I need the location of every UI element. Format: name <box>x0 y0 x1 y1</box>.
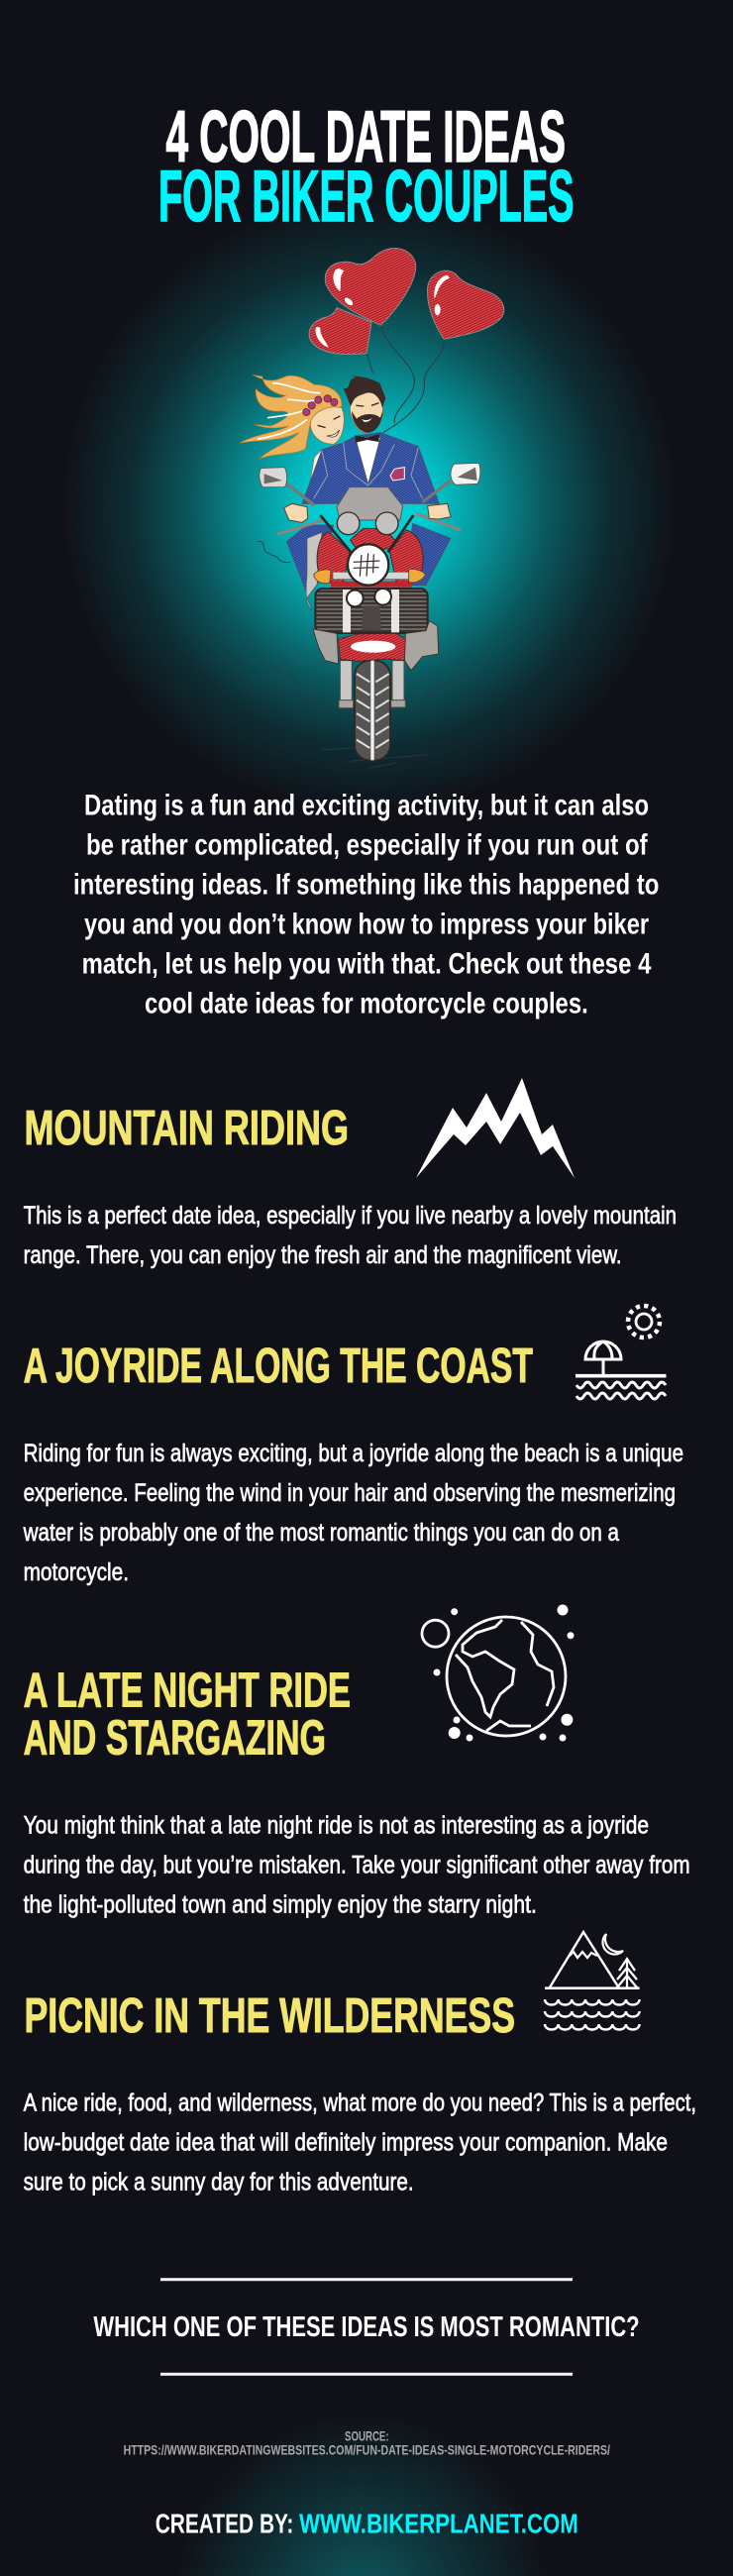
closing question <box>93 2278 640 2376</box>
credit <box>156 2509 578 2539</box>
side covers <box>313 621 439 671</box>
text: picnic <box>24 2090 696 2197</box>
icon: mountain, moon, tree and water <box>545 1932 640 2029</box>
text: late night ride <box>24 1812 690 1919</box>
man head <box>344 376 385 433</box>
legs in jacket blue <box>286 525 334 591</box>
icon: beach <box>576 1306 666 1399</box>
intro paragraph: cool date ideas for motorcycle couples. <box>145 988 588 1020</box>
source: SOURCE: <box>345 2427 389 2443</box>
balloon strings <box>366 325 444 433</box>
handlebar levers <box>277 513 461 534</box>
turn signals <box>314 570 425 584</box>
heart balloon right <box>427 270 504 339</box>
credit: CREATED BY: <box>156 2509 293 2539</box>
heart balloon lower left <box>309 308 371 355</box>
section: picnic in the wilderness <box>24 1932 696 2197</box>
section: joyride along the coast <box>23 1306 683 1586</box>
twin lights <box>337 512 398 535</box>
text: mountain riding <box>24 1202 677 1269</box>
balloon highlights <box>316 268 450 348</box>
heading: late night ride: A LATE NIGHT RIDE <box>24 1664 351 1718</box>
balloons and couple <box>240 249 504 505</box>
radiator block <box>315 589 428 633</box>
red tanks <box>317 528 423 584</box>
flowing hair <box>240 375 342 459</box>
tyre <box>355 661 390 760</box>
top glow <box>40 188 693 822</box>
bottom glow <box>99 2408 634 2576</box>
heading: mountain riding: MOUNTAIN RIDING <box>24 1101 349 1155</box>
wedding dress trail <box>258 542 468 768</box>
headlight <box>348 544 388 586</box>
text: picnic: sure to pick a sunny day for this adventure. <box>24 2169 414 2197</box>
section: late night ride <box>24 1605 690 1919</box>
icon: globe with stars <box>422 1605 575 1742</box>
fork legs <box>339 661 405 708</box>
heart balloon large <box>325 249 416 325</box>
heading: picnic: PICNIC IN THE WILDERNESS <box>24 1988 515 2043</box>
credit: WWW.BIKERPLANET.COM <box>299 2509 578 2539</box>
red fender <box>339 633 405 661</box>
woman face <box>310 407 344 444</box>
motorcycle <box>258 487 468 768</box>
shirt and bow tie <box>355 434 380 483</box>
heading: late night ride <box>24 1664 351 1766</box>
lower red bar <box>331 582 412 588</box>
text: joyride: motorcycle. <box>24 1558 129 1586</box>
side panel <box>306 532 322 610</box>
cross bar <box>333 572 410 580</box>
text: mountain riding: range. There, you can enjoy the fresh air and the magnificent view. <box>24 1241 622 1269</box>
source <box>124 2427 610 2458</box>
title <box>158 97 575 237</box>
jacket seams <box>314 443 423 498</box>
intro paragraph <box>73 790 659 1020</box>
mirrors and stems <box>260 463 480 505</box>
icon: mountain <box>416 1078 575 1178</box>
hands <box>284 503 451 522</box>
text: joyride <box>23 1440 683 1586</box>
illustration: couple on motorcycle with heart balloons <box>240 249 504 768</box>
flower crown <box>303 395 338 416</box>
man jacket <box>302 433 439 503</box>
fork arms <box>320 515 413 553</box>
section: mountain riding <box>24 1078 677 1269</box>
woman dress <box>307 449 340 498</box>
top fairing <box>337 487 403 520</box>
text: joyride: water is probably one of the most romantic things you can do on a <box>23 1519 619 1547</box>
heading: late night ride: AND STARGAZING <box>24 1711 326 1766</box>
text: late night ride: the light-polluted town and simply enjoy the starry night. <box>24 1891 537 1919</box>
pocket flower <box>390 468 404 481</box>
